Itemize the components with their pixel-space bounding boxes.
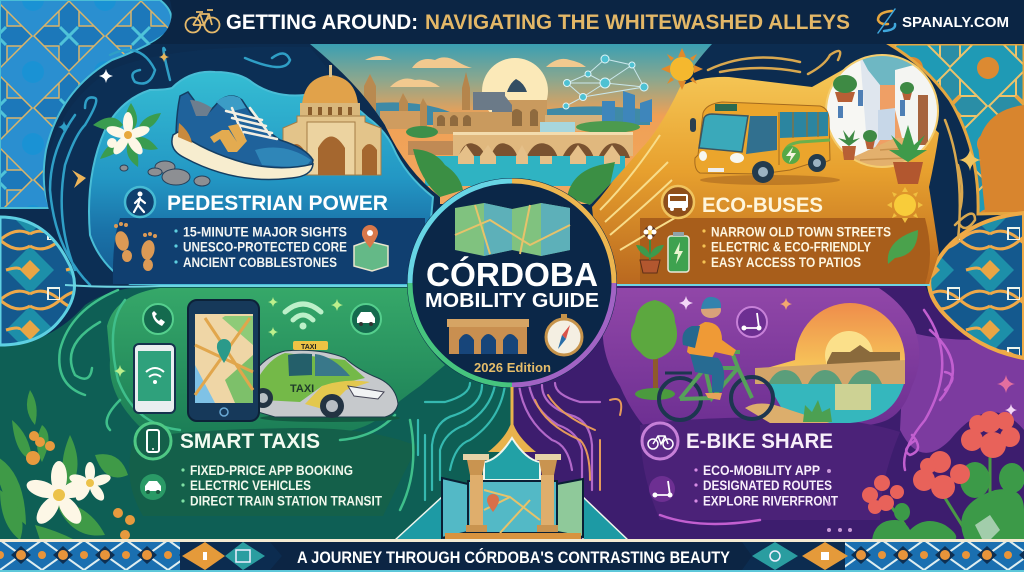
heading: SMART TAXIS — [180, 430, 320, 453]
illustration: geraniums — [862, 411, 1024, 545]
bullet list: ECO-MOBILITY APP — [703, 462, 820, 478]
ring quadrant: gold — [512, 181, 614, 283]
icon: e-bike and cyclist — [659, 297, 773, 420]
icon: jasmine flower — [93, 103, 161, 167]
panel: eco-buses — [592, 51, 981, 284]
decorative swirls — [50, 48, 290, 285]
text band — [640, 218, 930, 284]
panel: green backdrop — [0, 286, 512, 540]
text band — [113, 218, 425, 284]
illustration: riverside bank — [745, 403, 830, 423]
icon: bike badge — [642, 423, 678, 459]
cathedral roofs — [473, 92, 505, 110]
sparkles — [679, 296, 1017, 416]
illustration: orange blossom branch — [0, 390, 135, 540]
icon: bright sun — [661, 48, 703, 90]
pattern: top-left arabesque — [0, 0, 172, 208]
bridge piers — [458, 145, 620, 164]
title line 2: MOBILITY GUIDE — [425, 290, 599, 312]
centre map panel — [468, 481, 557, 533]
gold roof — [488, 420, 536, 452]
icon: smartphone badge — [135, 423, 171, 459]
icon: bus badge — [662, 186, 694, 218]
illustration: skyline of Córdoba — [300, 44, 720, 205]
circuit lines: bottom right — [519, 383, 600, 490]
panel background — [45, 47, 440, 286]
icon: tree — [631, 300, 677, 400]
icon: walker badge — [125, 187, 155, 217]
tile leaf — [484, 438, 540, 480]
icon: bicycle — [186, 10, 220, 32]
icon: taxi badge — [351, 304, 381, 334]
pattern: right tile lobe — [929, 213, 1024, 358]
icon: small phone — [134, 344, 175, 413]
panel: pedestrian power — [45, 47, 440, 286]
footer band — [0, 539, 1024, 572]
right map panel — [557, 479, 583, 537]
icon: bridge — [755, 360, 905, 384]
bullet list: DESIGNATED ROUTES — [703, 477, 832, 493]
bullet list: EXPLORE RIVERFRONT — [703, 492, 838, 508]
icon: running shoe — [172, 92, 313, 179]
left ornament strip — [0, 542, 190, 570]
icon: cobblestones — [120, 161, 210, 186]
pattern: top-right arabesque — [889, 44, 1024, 214]
icon: scooter round — [649, 476, 675, 502]
icon: leaf — [888, 230, 918, 264]
panel blob — [603, 288, 919, 428]
icon: arrow ornament — [72, 170, 86, 188]
icon: potted plants — [833, 75, 927, 184]
title line 1: CÓRDOBA — [426, 256, 598, 293]
icon: sun — [887, 187, 923, 223]
illustration: bottom gateway with map — [442, 387, 583, 539]
river banks — [413, 149, 615, 205]
panel: smart taxis — [0, 288, 445, 540]
icon: taxi: TAXI — [301, 344, 316, 351]
icon: map pin — [354, 225, 388, 271]
bullet list — [702, 224, 891, 270]
pattern: left tile lobe — [0, 217, 75, 345]
ribbon — [270, 542, 752, 570]
ornamental swirls — [59, 290, 413, 510]
ornamental swirls — [660, 310, 953, 524]
icon: call badge — [143, 304, 173, 334]
icon: logo — [878, 9, 895, 33]
dots — [827, 469, 852, 532]
circuit lines: bottom left — [418, 383, 505, 500]
panel: purple backdrop — [512, 286, 1024, 540]
panel background — [592, 60, 939, 284]
bottom edge — [0, 570, 1024, 572]
icon: bush — [803, 400, 832, 422]
bullet list: DIRECT TRAIN STATION TRANSIT — [190, 492, 382, 508]
bullet list: ELECTRIC & ECO-FRIENDLY — [711, 238, 872, 254]
brand: SPANALY.COM — [902, 14, 1009, 31]
icon: network graph — [563, 55, 648, 109]
ring quadrant: purple — [512, 283, 614, 385]
bullet list — [694, 462, 838, 508]
alley frame — [826, 55, 938, 167]
ornamental strokes — [708, 51, 975, 240]
icon: flower pot — [636, 226, 664, 273]
heading: PEDESTRIAN POWER — [167, 192, 388, 215]
right ornament strip — [840, 542, 1024, 570]
bullet list: FIXED-PRICE APP BOOKING — [190, 462, 353, 478]
old town houses — [380, 111, 420, 129]
heading: ECO-BUSES — [702, 194, 823, 217]
illustration: sunset and bridge — [769, 303, 905, 423]
sky — [300, 44, 720, 204]
icon: battery — [668, 232, 689, 272]
panel highlight blob — [89, 72, 433, 284]
bullet list: UNESCO-PROTECTED CORE — [183, 238, 347, 254]
cathedral arches — [437, 109, 538, 126]
pale water — [540, 122, 575, 133]
edition label: 2026 Edition — [474, 360, 551, 375]
cathedral dome — [507, 79, 527, 92]
bullet list — [181, 462, 382, 508]
light rays — [600, 135, 680, 250]
green trees left — [406, 126, 438, 138]
left map panel — [442, 478, 468, 538]
distant town — [545, 115, 605, 131]
right column — [535, 454, 561, 532]
heading: E-BIKE SHARE — [686, 430, 833, 453]
sparkles — [114, 297, 343, 377]
left column — [463, 454, 489, 532]
base strip — [445, 533, 581, 539]
divider lines — [65, 285, 930, 287]
text band — [640, 417, 900, 520]
icon: folded map — [455, 203, 570, 256]
bullet list: 15-MINUTE MAJOR SIGHTS — [183, 224, 347, 240]
bar — [150, 0, 1024, 44]
bullet list: EASY ACCESS TO PATIOS — [711, 254, 861, 270]
cathedral bell tower — [462, 72, 470, 110]
gold axis line — [510, 387, 514, 425]
panel: e-bike share — [603, 288, 1024, 545]
badge disc — [407, 178, 617, 388]
sun disc — [482, 58, 548, 112]
diamond tiles right — [745, 542, 848, 570]
sparkle stars — [58, 52, 169, 133]
panel: purple right band — [900, 330, 1024, 453]
cream rule — [0, 539, 1024, 542]
embankment — [408, 141, 458, 155]
icon: taxi round — [140, 474, 166, 500]
cathedral transept — [492, 96, 512, 112]
icon: mosque — [283, 65, 381, 175]
clouds — [365, 56, 586, 87]
icon: electric bus — [690, 102, 840, 185]
star — [959, 149, 981, 171]
top header bar — [150, 0, 1024, 44]
bullet list — [174, 224, 347, 270]
icon: compass — [546, 314, 582, 355]
icon: taxi: TAXI — [290, 383, 314, 395]
pattern: top-right orange lobe — [978, 105, 1024, 212]
bullet list: ELECTRIC VEHICLES — [190, 477, 311, 493]
bottom left tile wedge — [395, 497, 442, 540]
icon: taxi — [252, 341, 400, 422]
icon: footprints — [113, 222, 157, 271]
ring quadrant: green — [410, 283, 512, 385]
icon: scooter badge — [737, 307, 767, 337]
river — [425, 156, 625, 186]
roman bridge — [453, 132, 633, 158]
icon: roman bridge arches — [447, 319, 529, 354]
icon: wifi — [285, 304, 321, 330]
diamond tiles left — [180, 542, 275, 570]
title: GETTING AROUND: — [226, 11, 418, 34]
bullet list: NARROW OLD TOWN STREETS — [711, 224, 891, 240]
ring quadrant: cyan — [410, 181, 512, 283]
bullet list: ANCIENT COBBLESTONES — [183, 254, 337, 270]
central badge — [407, 178, 617, 388]
green trees right — [576, 121, 640, 133]
illustration: whitewashed alley — [827, 56, 937, 166]
icon: large phone with map — [188, 300, 259, 421]
modern towers — [602, 91, 652, 124]
title accent: NAVIGATING THE WHITEWASHED ALLEYS — [425, 11, 850, 34]
blue hills — [375, 102, 650, 125]
cathedral walls — [433, 100, 547, 134]
circuit accents: orange and blue — [535, 395, 621, 490]
text band — [129, 428, 418, 516]
footer caption: A JOURNEY THROUGH CÓRDOBA'S CONTRASTING BEAUTY — [297, 548, 731, 567]
bottom right tile wedge — [583, 497, 628, 540]
panel blob — [107, 288, 445, 436]
left towers — [364, 74, 427, 128]
